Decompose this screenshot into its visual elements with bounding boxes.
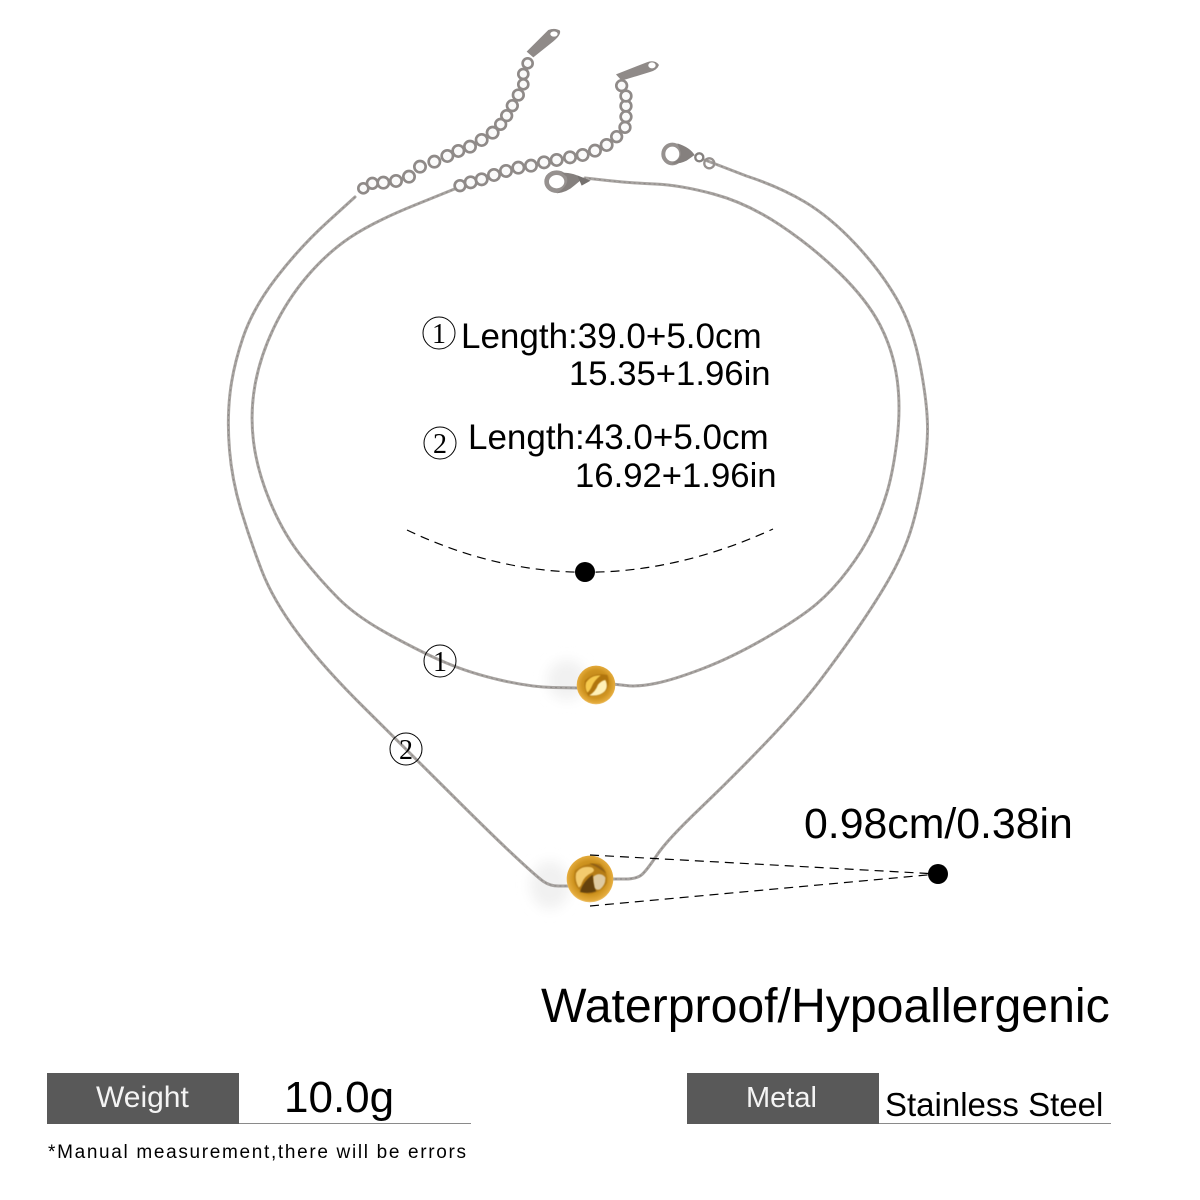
length spec: necklace 1 xyxy=(423,317,771,393)
marker 1 on short chain xyxy=(424,645,456,678)
spec row: weight xyxy=(47,1073,471,1124)
bead size label: 0.98cm/0.38in xyxy=(804,800,1073,848)
spec row: weight: Weight xyxy=(96,1081,189,1114)
dashed lines with dot: bead size indicator xyxy=(590,855,948,906)
spec row: weight: 10.0g xyxy=(284,1073,394,1122)
length spec: necklace 2: 16.92+1.96in xyxy=(575,457,777,495)
gold bead: necklace 1 xyxy=(577,666,615,704)
gold bead: necklace 2 xyxy=(567,856,613,902)
length spec: necklace 1: Length:39.0+5.0cm xyxy=(461,317,762,356)
measurement note: *Manual measurement,there will be errors xyxy=(48,1142,466,1163)
marker 1 on short chain: 1 xyxy=(433,647,447,678)
pendant shadows xyxy=(530,660,587,909)
marker 2 on long chain: 2 xyxy=(399,735,413,766)
necklace 2: long chain xyxy=(228,160,928,886)
length spec: necklace 1: 15.35+1.96in xyxy=(569,355,771,393)
clasp: necklace 2 xyxy=(663,143,714,168)
spec row: metal xyxy=(687,1073,1111,1124)
spec row: metal: Stainless Steel xyxy=(885,1086,1103,1123)
extender chain and tag: necklace 1 xyxy=(455,61,659,191)
spec row: metal: Metal xyxy=(746,1082,817,1114)
feature heading: Waterproof/Hypoallergenic xyxy=(541,979,1110,1033)
length spec: necklace 2: Length:43.0+5.0cm xyxy=(468,418,769,457)
clasp: necklace 1 xyxy=(547,173,591,193)
length spec: necklace 2 xyxy=(424,418,777,495)
marker 2 on long chain xyxy=(390,733,422,766)
dashed arc with dot: length indicator xyxy=(407,529,773,582)
extender chain and tag: necklace 2 xyxy=(358,29,560,193)
length spec: necklace 1: 1 xyxy=(432,319,446,350)
length spec: necklace 2: 2 xyxy=(433,429,447,460)
necklace 1: short chain xyxy=(252,178,899,688)
